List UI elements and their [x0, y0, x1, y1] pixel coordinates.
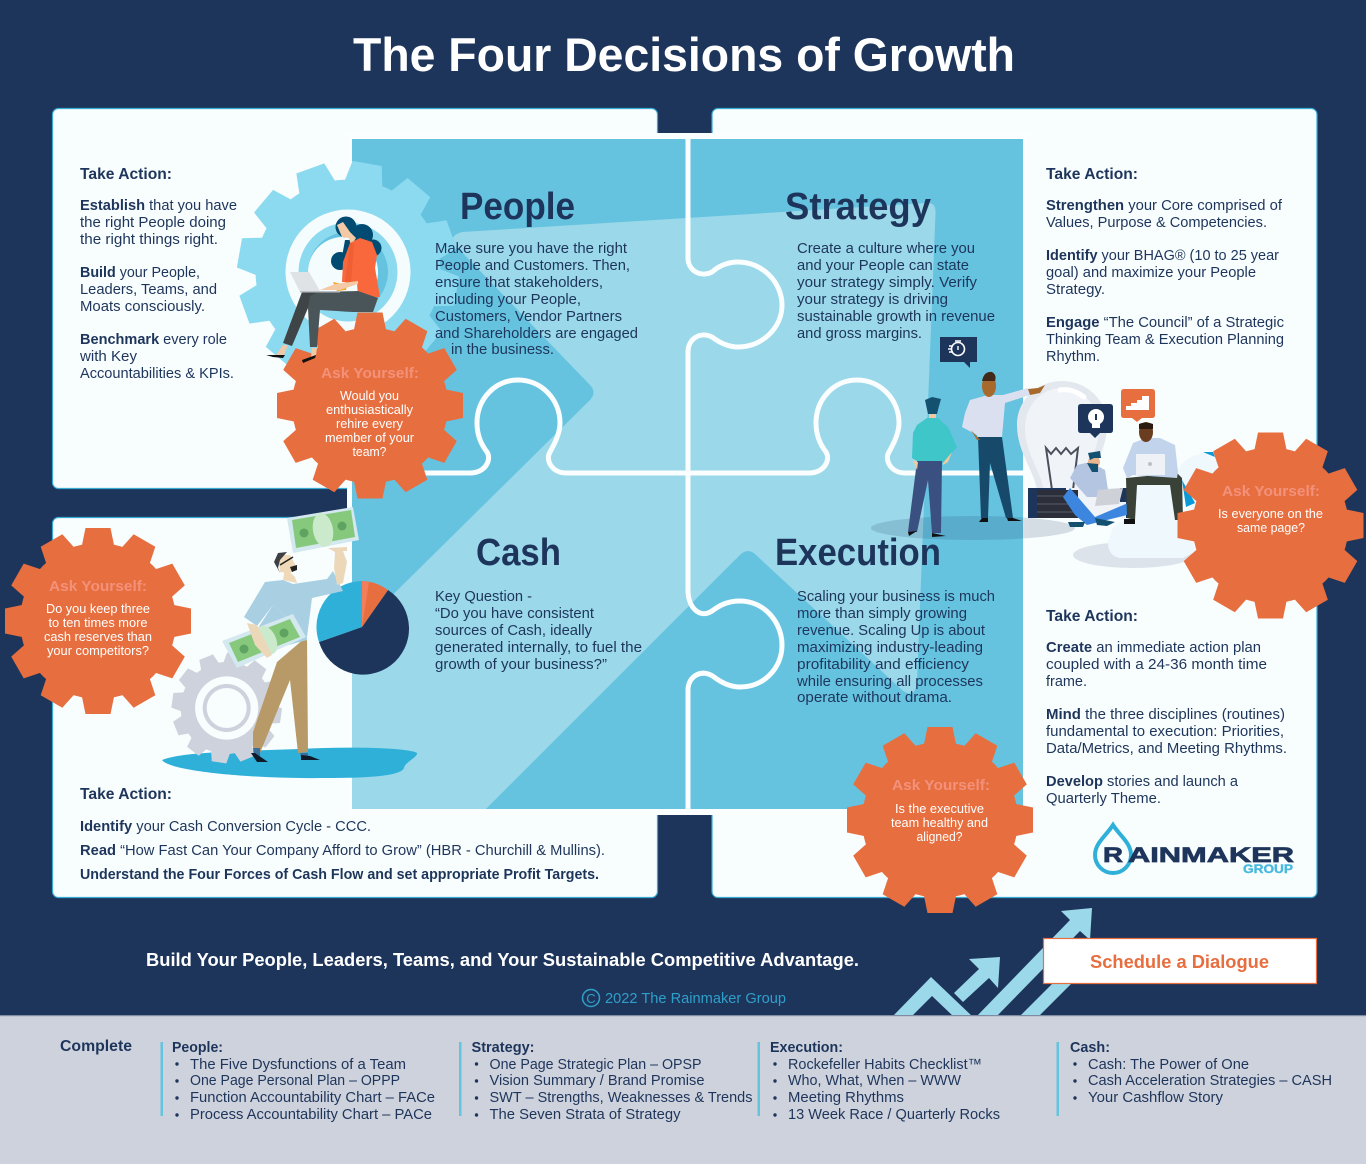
shape: blue puddle [162, 748, 417, 778]
gear: cash ask yourself: Do you keep three [46, 602, 150, 616]
text: strategy take action [1046, 166, 1284, 365]
gear: cash ask yourself: cash reserves than [44, 630, 152, 644]
gear: people ask yourself: enthusiastically [326, 403, 414, 417]
logo: rainmaker group: AINMAKER [1128, 844, 1294, 867]
text: people description: in the business. [451, 341, 554, 358]
text: people take action [79, 166, 237, 382]
list: strategy tools: The Seven Strata of Strategy [490, 1107, 681, 1123]
arrows: rising growth arrows [892, 908, 1092, 1017]
text: people take action: Benchmark every role [80, 331, 227, 348]
text: cash description: sources of Cash, ideally [435, 622, 592, 639]
gear: people ask yourself: member of your [325, 431, 414, 445]
text: people description: Make sure you have the right [435, 240, 628, 257]
text: people take action: with Key [79, 348, 137, 365]
figure: seated man with beard [1063, 451, 1128, 527]
gear: people ask yourself: Would you [340, 389, 399, 403]
gear: people ask yourself: Ask Yourself: [321, 365, 419, 382]
text: execution take action [1046, 608, 1287, 807]
text: strategy description: Create a culture where you [797, 240, 975, 257]
text: execution description: profitability and efficiency [797, 656, 969, 673]
icon: light bulb bubble [1078, 404, 1113, 438]
text: strategy take action: Rhythm. [1046, 348, 1100, 365]
text: people take action: Moats consciously. [80, 298, 205, 315]
list: people tools: Function Accountability Chart – FACe [190, 1090, 435, 1106]
gear: execution ask yourself: aligned? [916, 830, 962, 844]
gear: execution ask yourself [847, 727, 1033, 913]
text: strategy take action: Identify your BHAG® (10 to 25 year [1046, 247, 1279, 264]
text: cash take action [80, 786, 605, 883]
chart: pie chart [316, 581, 409, 675]
text: cash description [435, 588, 642, 673]
text: execution take action: Data/Metrics, and Meeting Rhythms. [1046, 740, 1287, 757]
button: schedule a dialogue: Schedule a Dialogue [1090, 951, 1269, 972]
list: people tools: People: [172, 1039, 223, 1056]
list: strategy tools: SWT – Strengths, Weaknesses & Trends [490, 1090, 752, 1106]
list: people tools: The Five Dysfunctions of a Team [190, 1057, 406, 1073]
gear: strategy ask yourself: Ask Yourself: [1222, 483, 1320, 500]
figure: man in teal [908, 397, 957, 537]
text: execution description [796, 588, 995, 706]
list: execution tools: Who, What, When – WWW [788, 1073, 961, 1089]
list: strategy tools [459, 1039, 752, 1123]
illustration: man with money, gear and pie chart [162, 507, 417, 778]
text: people take action: Leaders, Teams, and [80, 281, 217, 298]
heading: cash: Cash [476, 532, 561, 574]
text: strategy description: and gross margins. [797, 325, 922, 342]
figure: man pointing at bulb [962, 372, 1045, 522]
text: strategy description: your strategy is driving [797, 291, 948, 308]
text: strategy description: and your People can state [797, 257, 969, 274]
figure: seated man with laptop [1123, 422, 1183, 524]
text: execution take action: frame. [1046, 673, 1087, 690]
text: cash description: “Do you have consistent [435, 605, 595, 622]
text: people take action: Take Action: [80, 166, 172, 183]
icon: gray gear [165, 646, 289, 770]
text: people description: ensure that stakeholders, [435, 274, 603, 291]
puzzle: four decisions puzzle [347, 133, 1029, 815]
list: cash tools: Cash: [1070, 1039, 1110, 1056]
text: execution take action: coupled with a 24-36 month time [1046, 656, 1267, 673]
tagline: Build Your People, Leaders, Teams, and Your Sustainable Competitive Advantage. [146, 949, 859, 970]
heading: people: People [460, 186, 575, 228]
text: people description: Customers, Vendor Partners [435, 308, 622, 325]
text: execution take action: Create an immediate action plan [1046, 639, 1261, 656]
text: cash description: growth of your business?” [435, 656, 607, 673]
text: execution description: more than simply growing [797, 605, 967, 622]
list: cash tools: Cash Acceleration Strategies – CASH [1088, 1073, 1332, 1089]
text: strategy take action: goal) and maximize your People [1046, 264, 1256, 281]
list: people tools [160, 1039, 435, 1123]
list: people tools: Process Accountability Chart – PACe [190, 1107, 432, 1123]
gear: execution ask yourself: Ask Yourself: [892, 777, 990, 794]
copyright: C [586, 991, 596, 1006]
text: cash take action: Read “How Fast Can Your Company Afford to Grow” (HBR - Churchill & Mullins). [80, 842, 605, 859]
list: execution tools: Rockefeller Habits Checklist™ [788, 1057, 982, 1073]
icon: stopwatch bubble [940, 337, 977, 368]
text: strategy take action: Strengthen your Core comprised of [1046, 197, 1283, 214]
gear: execution ask yourself: Is the executive [895, 802, 984, 816]
figure: man holding money [222, 507, 359, 762]
text: execution take action: Take Action: [1046, 608, 1138, 625]
text: execution description: revenue. Scaling Up is about [797, 622, 986, 639]
button: schedule a dialogue [1044, 938, 1316, 984]
gear: cash ask yourself: your competitors? [47, 644, 149, 658]
gear: strategy ask yourself [1178, 432, 1364, 618]
logo: rainmaker group [1095, 825, 1294, 876]
list: strategy tools: Strategy: [472, 1039, 534, 1056]
text: strategy take action: Values, Purpose & Competencies. [1046, 214, 1267, 231]
list: execution tools: Meeting Rhythms [788, 1090, 904, 1106]
text: people description: and Shareholders are engaged [435, 325, 638, 342]
gear: cash ask yourself [5, 528, 191, 714]
gear: people ask yourself [277, 312, 463, 498]
panel: cash take action card [52, 518, 658, 898]
gear: strategy ask yourself: Is everyone on the [1218, 507, 1323, 521]
heading: execution: Execution [775, 532, 941, 574]
text: people take action: the right People doing [80, 214, 226, 231]
gear: people ask yourself: rehire every [336, 417, 404, 431]
gear: cash ask yourself: Ask Yourself: [49, 578, 147, 595]
text: strategy take action: Engage “The Council” of a Strategic [1046, 314, 1284, 331]
list: cash tools: Cash: The Power of One [1088, 1057, 1249, 1073]
gear: people ask yourself: team? [352, 445, 386, 459]
logo: rainmaker group: GROUP [1243, 862, 1293, 876]
list: cash tools [1056, 1039, 1332, 1116]
text: execution description: maximizing industry-leading [797, 639, 983, 656]
illustration: strategy team and light bulb [871, 337, 1225, 568]
text: strategy take action: Strategy. [1046, 281, 1105, 298]
illustration: woman with laptop [266, 216, 382, 363]
text: people description: including your People, [435, 291, 581, 308]
panel: complete footer [0, 1015, 1366, 1164]
panel: strategy and execution take action card [712, 108, 1317, 898]
list: strategy tools: One Page Strategic Plan – OPSP [490, 1057, 702, 1073]
text: strategy take action: Take Action: [1046, 166, 1138, 183]
text: execution description: operate without drama. [797, 689, 952, 706]
text: cash take action: Understand the Four Forces of Cash Flow and set appropriate Profit Targets. [80, 866, 599, 883]
text: people description [435, 240, 638, 358]
panel: people take action card [52, 108, 658, 488]
list: execution tools: 13 Week Race / Quarterly Rocks [788, 1107, 1000, 1123]
text: people take action: Accountabilities & KPIs. [80, 365, 234, 382]
copyright: 2022 The Rainmaker Group [605, 990, 786, 1007]
icon: people blue gear [220, 144, 476, 400]
text: strategy description [797, 240, 995, 342]
text: people take action: Build your People, [80, 264, 200, 281]
list: execution tools: Execution: [770, 1039, 843, 1056]
list: cash tools: Your Cashflow Story [1088, 1090, 1224, 1106]
text: cash description: generated internally, to fuel the [435, 639, 642, 656]
text: people description: People and Customers. Then, [435, 257, 630, 274]
text: people take action: Establish that you have [80, 197, 237, 214]
list: execution tools [758, 1039, 1000, 1123]
text: cash take action: Take Action: [80, 786, 172, 803]
gear: strategy ask yourself: same page? [1237, 521, 1305, 535]
text: execution take action: fundamental to execution: Priorities, [1046, 723, 1284, 740]
text: strategy description: sustainable growth in revenue [797, 308, 995, 325]
text: strategy take action: Thinking Team & Execution Planning [1046, 331, 1284, 348]
heading: strategy: Strategy [785, 186, 931, 228]
text: strategy description: your strategy simply. Verify [797, 274, 977, 291]
text: people take action: the right things right. [80, 231, 218, 248]
heading: complete: Complete [60, 1038, 132, 1055]
list: strategy tools: Vision Summary / Brand Promise [490, 1073, 704, 1089]
text: cash take action: Identify your Cash Conversion Cycle - CCC. [80, 818, 371, 835]
text: execution description: Scaling your business is much [797, 588, 995, 605]
text: execution take action: Mind the three disciplines (routines) [1046, 706, 1285, 723]
text: cash description: Key Question - [435, 588, 532, 605]
text: execution take action: Quarterly Theme. [1046, 790, 1161, 807]
text: execution take action: Develop stories and launch a [1046, 773, 1239, 790]
logo: rainmaker group: R [1103, 844, 1123, 867]
icon: bar chart bubble [1121, 389, 1155, 422]
gear: execution ask yourself: team healthy and [891, 816, 988, 830]
text: execution description: while ensuring all processes [796, 673, 983, 690]
title: The Four Decisions of Growth [353, 28, 1015, 81]
gear: cash ask yourself: to ten times more [48, 616, 148, 630]
list: people tools: One Page Personal Plan – OPPP [190, 1073, 400, 1089]
